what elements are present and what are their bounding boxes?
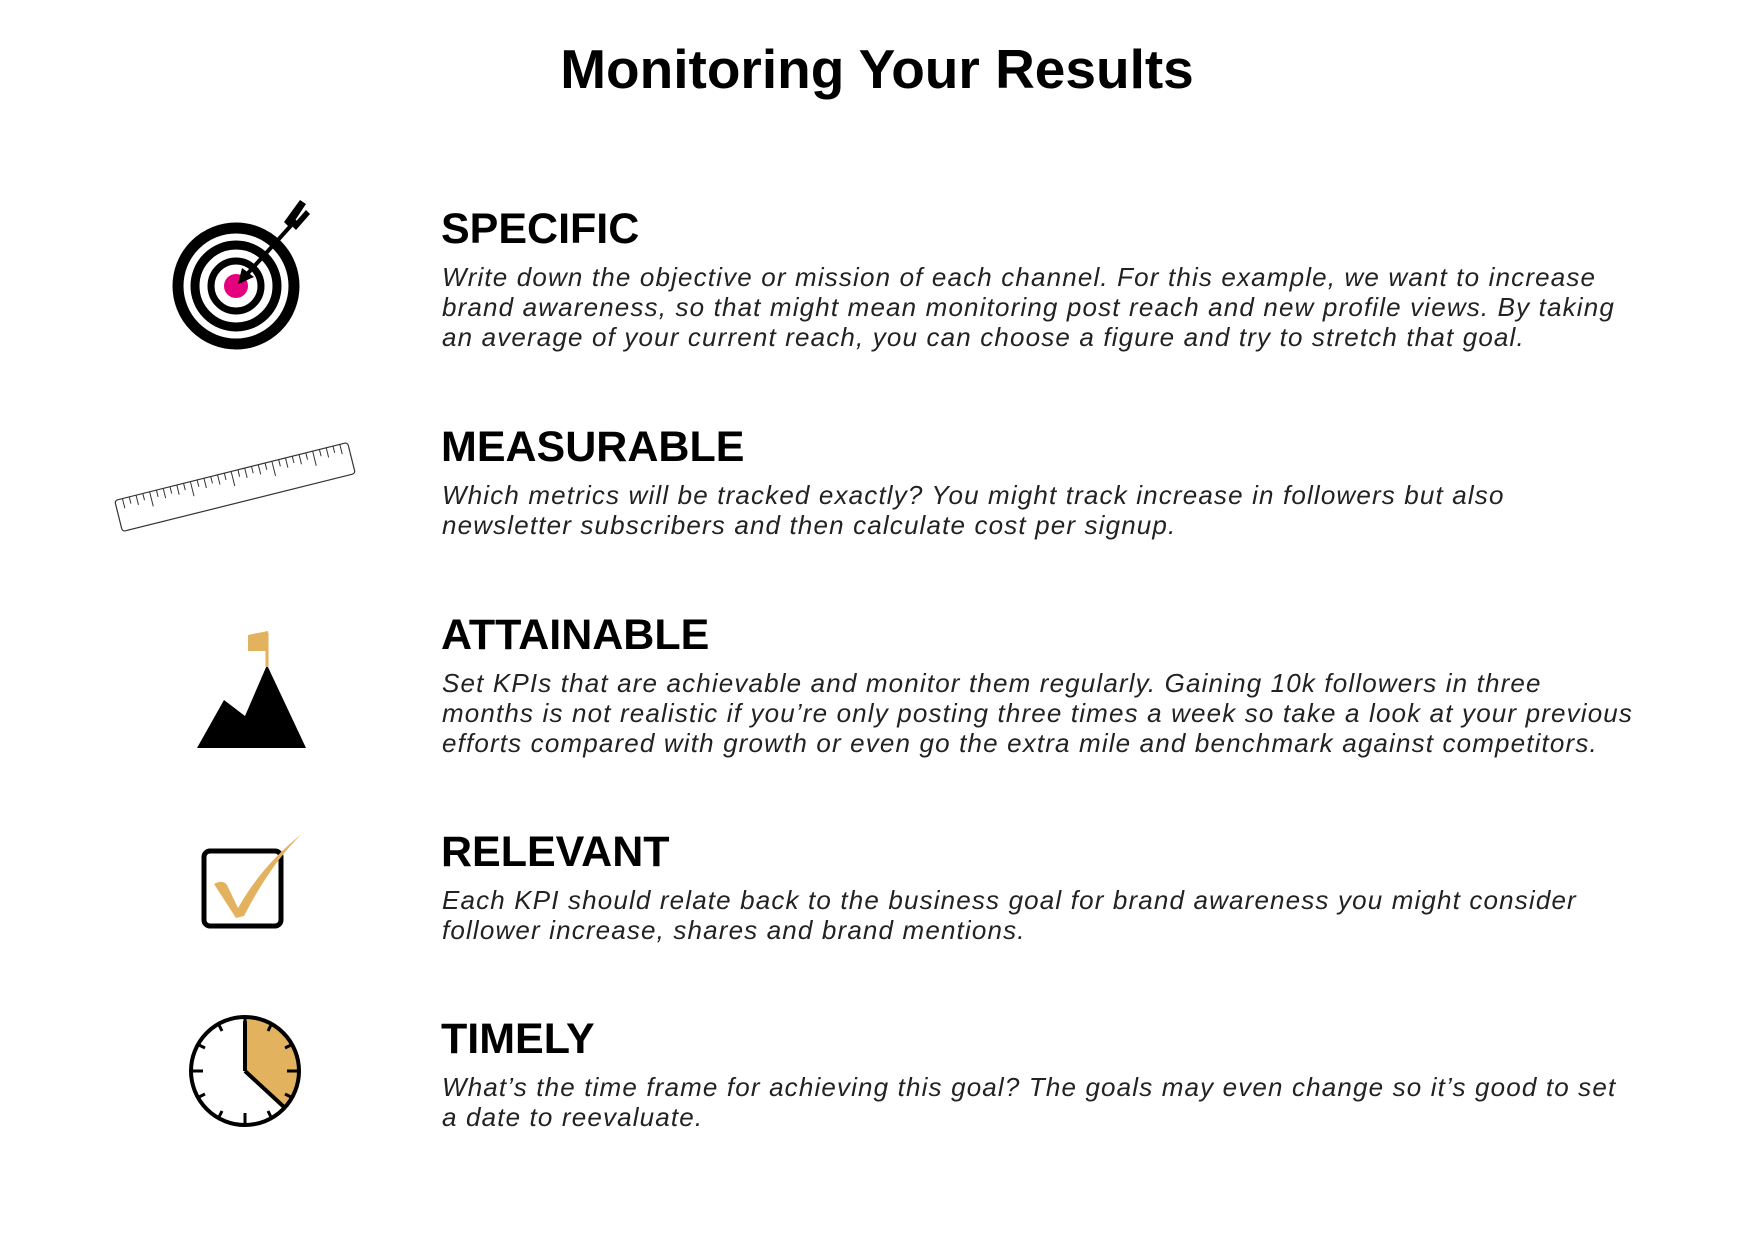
heading: timely: TIMELY — [441, 1015, 595, 1063]
text: relevant: Each KPI should relate back to the business goal for brand awareness you might consider — [442, 885, 1577, 915]
text: specific — [442, 262, 1615, 352]
text: timely: What’s the time frame for achieving this goal? The goals may even change so it’s good to set — [442, 1072, 1616, 1102]
text: attainable: efforts compared with growth or even go the extra mile and benchmark against competitors. — [442, 728, 1598, 758]
text: measurable: newsletter subscribers and then calculate cost per signup. — [442, 510, 1176, 540]
icon: target with arrow — [172, 200, 310, 350]
text: timely: a date to reevaluate. — [442, 1102, 703, 1132]
text: specific: brand awareness, so that might mean monitoring post reach and new profile views. By taking — [442, 292, 1615, 322]
text: attainable — [442, 668, 1633, 758]
text: timely — [442, 1072, 1616, 1132]
text: measurable — [442, 480, 1505, 540]
text: attainable: months is not realistic if you’re only posting three times a week so take a look at your previous — [442, 698, 1633, 728]
heading: measurable: MEASURABLE — [441, 423, 744, 471]
text: specific: Write down the objective or mission of each channel. For this example, we want to increase — [442, 262, 1596, 292]
icon: checkbox — [202, 834, 302, 928]
heading: specific: SPECIFIC — [441, 205, 639, 253]
heading: relevant: RELEVANT — [441, 828, 670, 876]
text: relevant: follower increase, shares and brand mentions. — [442, 915, 1026, 945]
icon: ruler — [114, 442, 356, 532]
heading: attainable: ATTAINABLE — [441, 611, 709, 659]
text: specific: an average of your current reach, you can choose a figure and try to stretch that goal. — [442, 322, 1525, 352]
text: attainable: Set KPIs that are achievable and monitor them regularly. Gaining 10k followers in three — [442, 668, 1542, 698]
title: Monitoring Your Results — [560, 38, 1194, 100]
text: measurable: Which metrics will be tracked exactly? You might track increase in followers but also — [442, 480, 1505, 510]
icon: clock — [189, 1015, 301, 1127]
text: relevant — [442, 885, 1577, 945]
icon: mountain with flag — [197, 631, 306, 748]
